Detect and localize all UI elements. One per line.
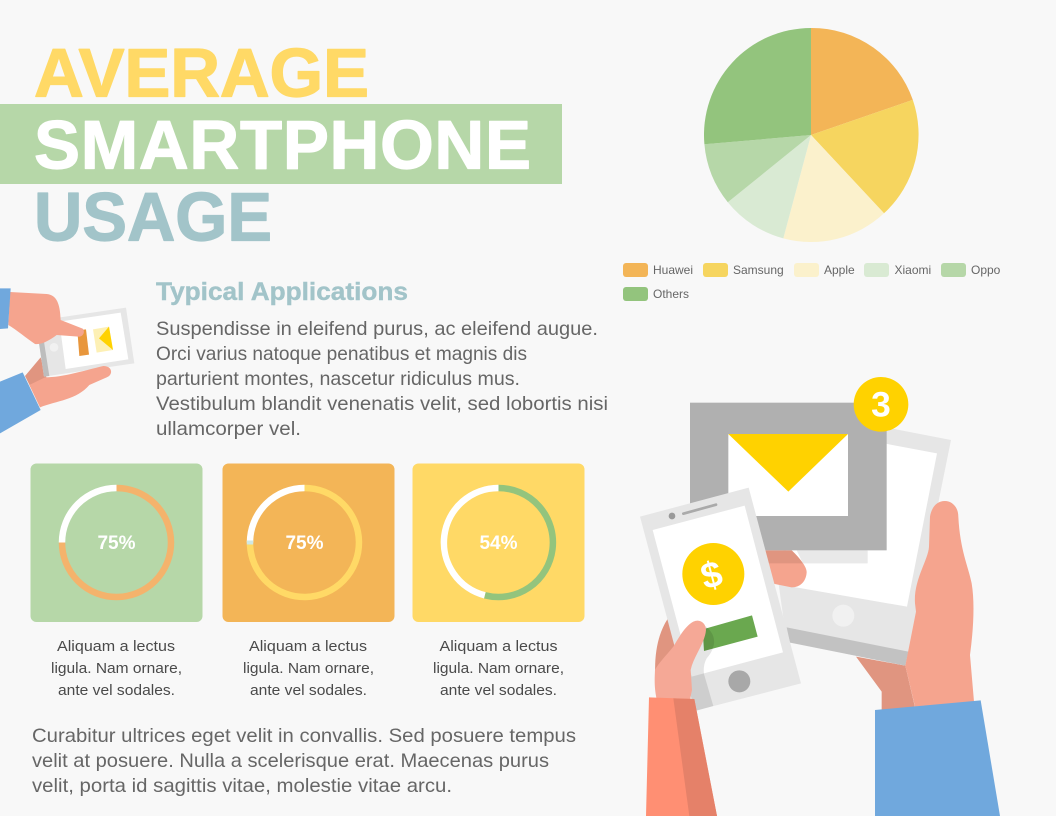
pie chart	[704, 28, 919, 242]
panel: stat card 1	[30, 464, 202, 622]
caption: card 1: ligula. Nam ornare,	[51, 661, 182, 677]
illustration: hands with phone, tablet and message	[640, 377, 1000, 816]
icon: phone: $	[696, 552, 727, 597]
icon: right sleeve	[875, 700, 1000, 816]
icon: left sleeve	[646, 697, 717, 816]
caption: card 1	[51, 639, 182, 699]
icon: hands holding landscape phone	[0, 288, 134, 433]
icon: envelope	[690, 403, 887, 550]
pie legend: Huawei	[653, 263, 693, 277]
title band	[0, 104, 562, 184]
icon: notification badge	[854, 377, 908, 432]
title: SMARTPHONE	[34, 106, 531, 184]
text block: intro: Vestibulum blandit venenatis velit, sed lobortis nisi	[156, 393, 608, 415]
pie legend: Xiaomi	[894, 263, 931, 277]
text block: closing: velit at posuere. Nulla a scelerisque erat. Maecenas purus	[32, 750, 549, 772]
text block: closing: velit, porta id sagittis vitae, molestie vitae arcu.	[32, 775, 452, 797]
icon: finger behind tablet	[763, 550, 868, 587]
text block: closing: Curabitur ultrices eget velit in convallis. Sed posuere tempus	[32, 725, 576, 747]
panel: stat card 3	[412, 464, 584, 622]
panel: stat card 3: 54%	[479, 533, 518, 554]
text block: intro	[156, 318, 608, 440]
icon: left palm	[655, 619, 697, 698]
pie legend: Others	[653, 287, 689, 301]
text block: intro: Suspendisse in eleifend purus, ac eleifend augue.	[156, 318, 598, 340]
text block: intro: Orci varius natoque penatibus et magnis dis	[156, 343, 527, 365]
caption: card 3: Aliquam a lectus	[440, 639, 558, 655]
pie legend: Oppo	[971, 263, 1001, 277]
pie legend: Samsung	[733, 263, 784, 277]
caption: card 2: Aliquam a lectus	[249, 639, 367, 655]
text block: intro: ullamcorper vel.	[156, 418, 301, 440]
caption: card 2	[243, 639, 374, 699]
text block: intro: parturient montes, nascetur ridiculus mus.	[156, 368, 520, 390]
caption: card 1: Aliquam a lectus	[57, 639, 175, 655]
caption: card 2: ligula. Nam ornare,	[243, 661, 374, 677]
icon: phone	[640, 488, 801, 712]
title: USAGE	[34, 178, 272, 256]
pie legend: Apple	[824, 263, 855, 277]
icon: tablet	[773, 417, 951, 666]
pie legend	[623, 263, 1001, 301]
caption: card 3: ligula. Nam ornare,	[433, 661, 564, 677]
title	[34, 34, 531, 256]
icon: right hand	[905, 501, 974, 707]
panel: stat card 2	[222, 464, 394, 622]
title: AVERAGE	[34, 34, 369, 112]
panel: stat card 1: 75%	[97, 533, 136, 554]
heading: typical applications: Typical Applications	[156, 278, 408, 306]
icon: notification badge: 3	[871, 386, 891, 425]
caption: card 3: ante vel sodales.	[440, 683, 557, 699]
caption: card 1: ante vel sodales.	[58, 683, 175, 699]
icon: tablet palm	[856, 657, 915, 710]
caption: card 3	[433, 639, 564, 699]
icon: left thumb	[655, 621, 706, 699]
caption: card 2: ante vel sodales.	[250, 683, 367, 699]
panel: stat card 2: 75%	[285, 533, 324, 554]
text block: closing	[32, 725, 576, 797]
